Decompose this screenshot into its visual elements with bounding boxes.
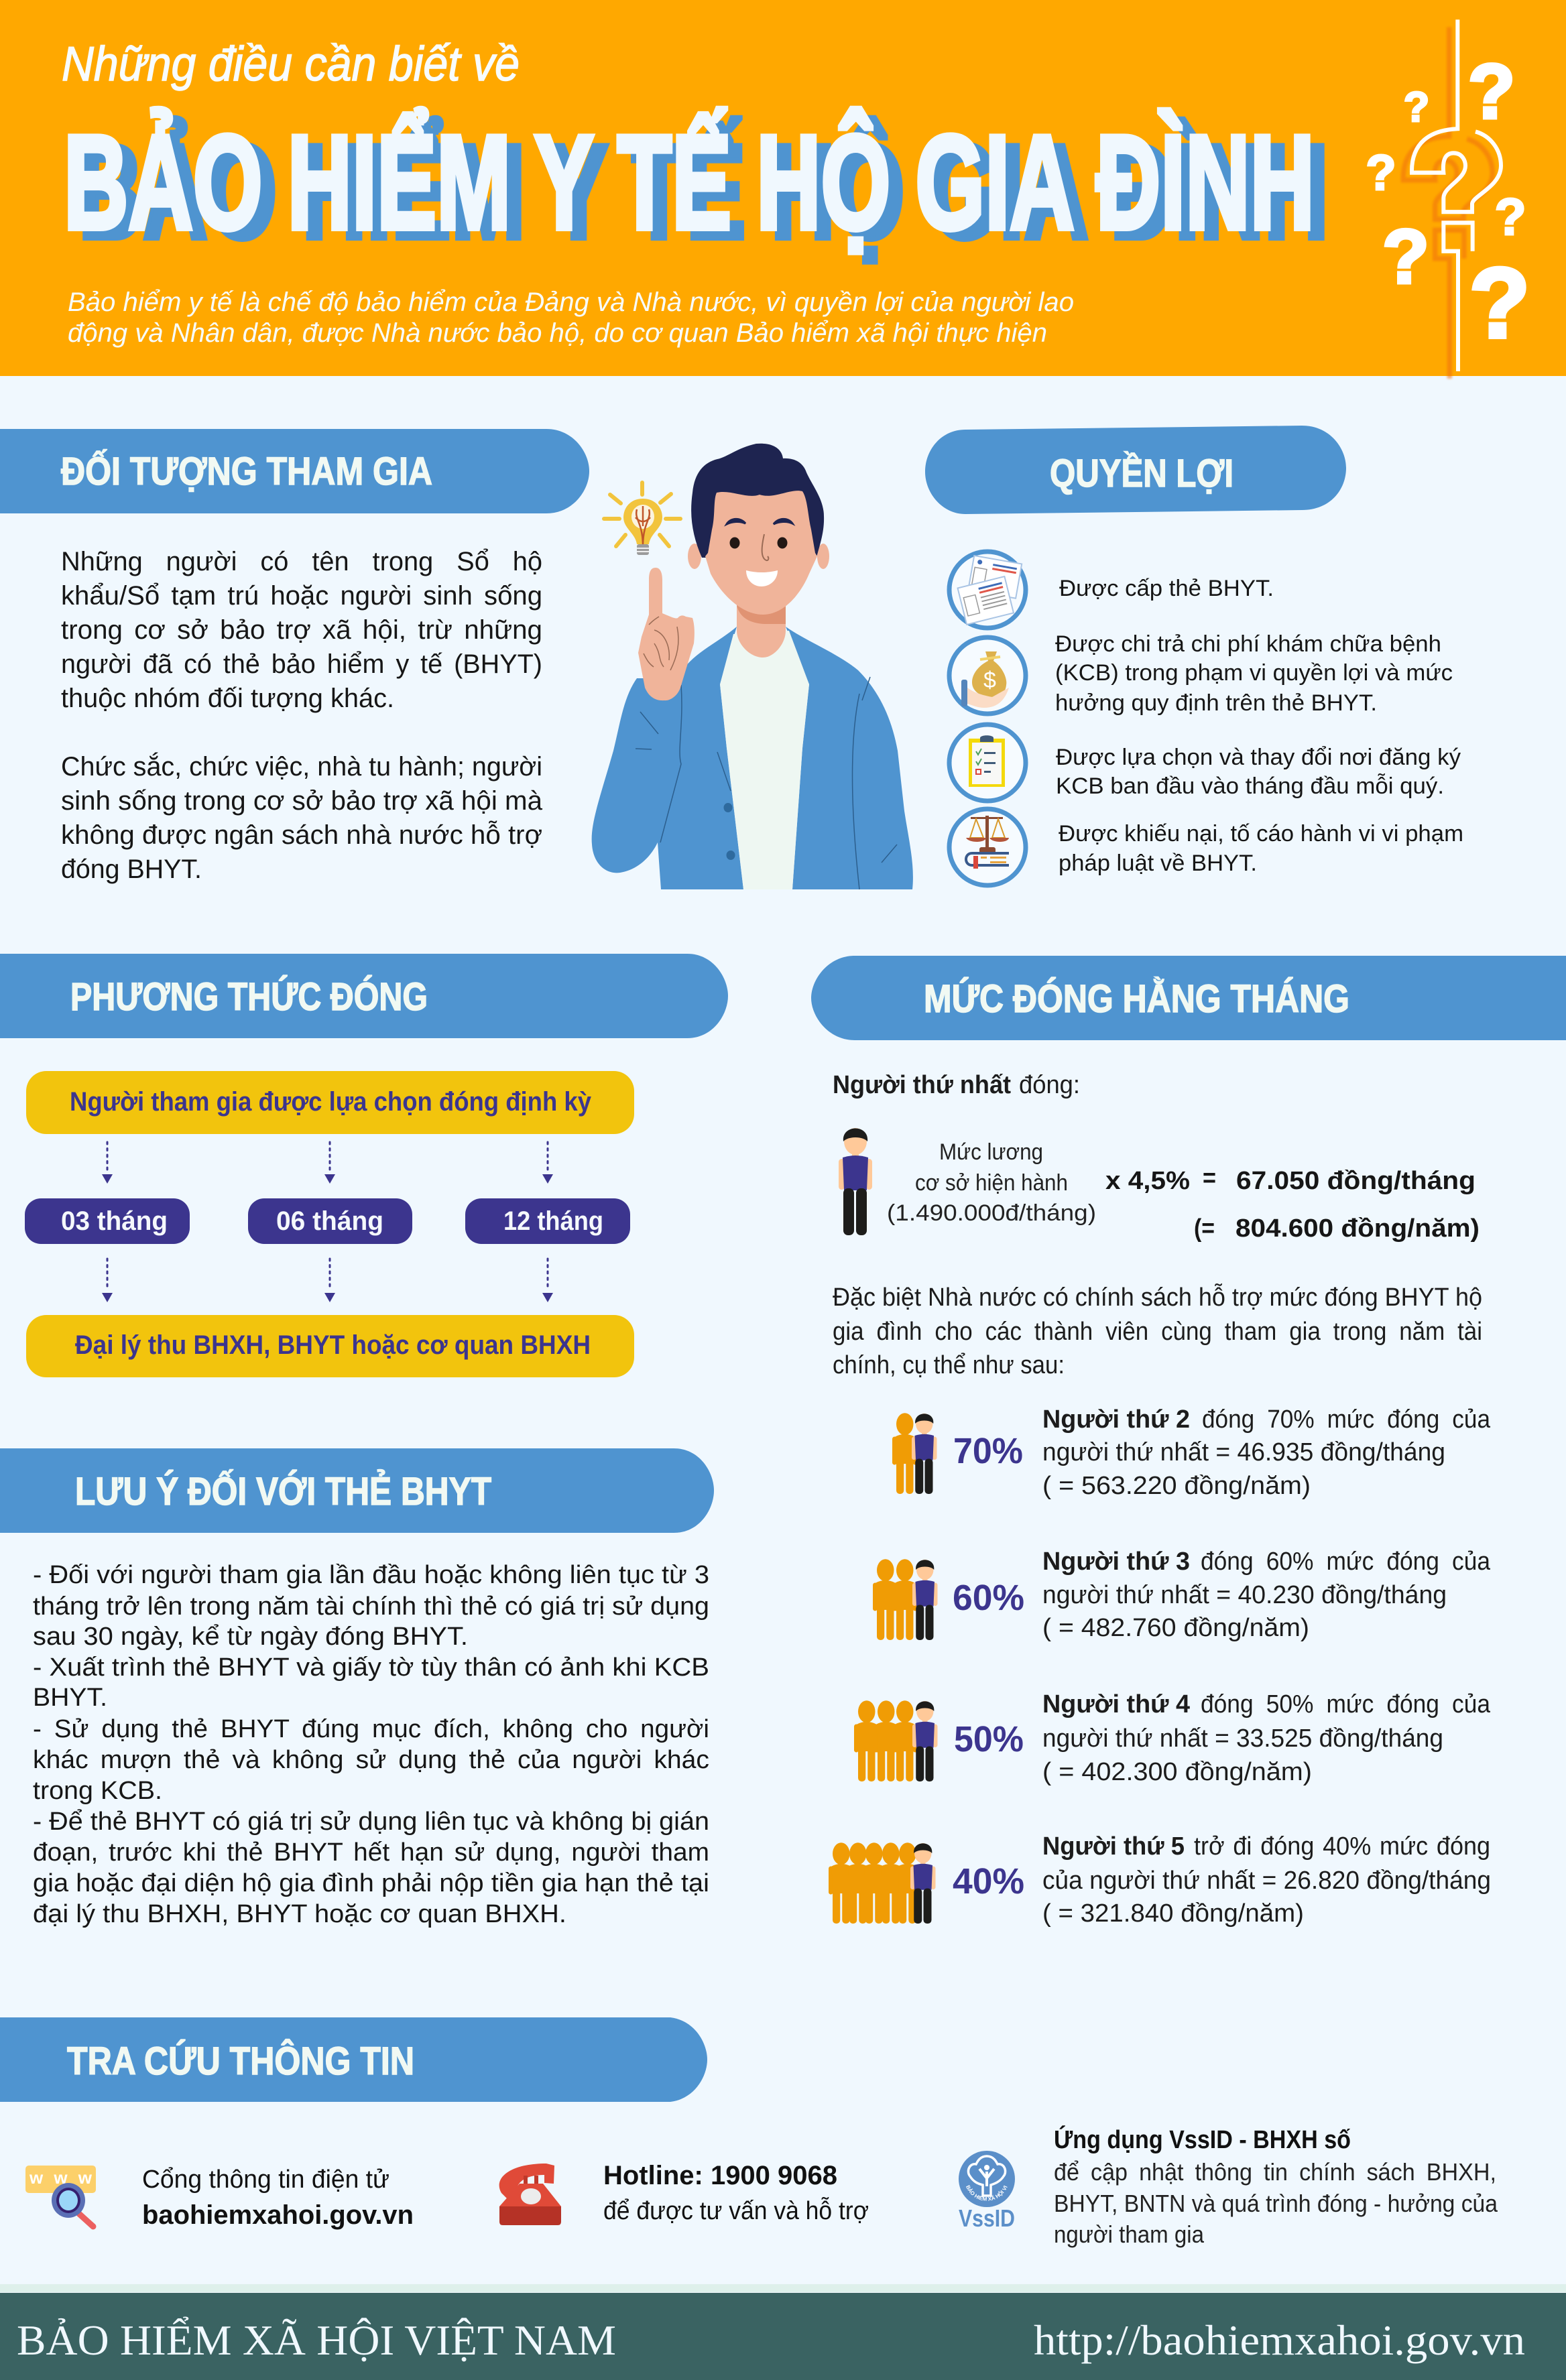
face [705,491,817,615]
icon: VssID logo [959,2151,1015,2232]
text: portal [142,2166,414,2230]
intro text: động và Nhân dân, được Nhà nước bảo hộ, do cơ quan Bảo hiểm xã hội thực hiện [68,318,1047,348]
text block: who: đóng BHYT. [61,855,202,884]
text: policy [833,1283,1482,1379]
text block: who: thuộc nhóm đối tượng khác. [61,684,394,713]
text: first person: đóng: [1019,1071,1080,1099]
text: hotline: Hotline: 1900 9068 [603,2161,837,2190]
icon: question marks: ? [1366,145,1396,200]
text block: who: không được ngân sách nhà nước hỗ trợ [61,820,542,850]
panel: lưu ý đối với thẻ BHYT [0,1448,714,1928]
ears [688,544,701,569]
box: 12 tháng [465,1198,630,1244]
intro text: Bảo hiểm y tế là chế độ bảo hiểm của Đảng và Nhà nước, vì quyền lợi của người lao [68,288,1074,317]
arrows: to agents [102,1259,553,1302]
icon: VssID logo: BẢO HIỂM XÃ HỘI VIỆT NAM [966,2185,1008,2201]
intro text [68,288,1074,348]
icon: www magnifier [25,2166,96,2227]
text: benefits list: (KCB) trong phạm vi quyền lợi và mức [1055,660,1453,686]
heading pill [0,2017,707,2102]
text block: notes: BHYT. [33,1684,107,1712]
footer bar [0,2284,1566,2380]
row: 50%: đóng 50% mức đóng của [1201,1690,1491,1718]
icon: telephone [499,2164,561,2225]
box: 03 tháng: 03 tháng [61,1206,168,1236]
panel: đối tượng tham gia [0,429,589,884]
row: 40% [829,1832,1491,1928]
text: benefits list: hưởng quy định trên thẻ BHYT. [1055,690,1377,716]
row: 40%: trở đi đóng 40% mức đóng [1194,1832,1490,1861]
text: benefits list: Được chi trả chi phí khám chữa bệnh [1055,631,1441,657]
heading pill: QUYỀN LỢI [1050,452,1233,495]
text block: notes [33,1561,709,1928]
heading pill: PHƯƠNG THỨC ĐÓNG [70,975,428,1019]
icon: VssID logo: VssID [959,2204,1015,2232]
row: 40%: Người thứ 5 [1042,1832,1185,1861]
box: agents [26,1315,634,1377]
heading pill [925,426,1346,514]
text: benefits list: Được cấp thẻ BHYT. [1059,576,1274,601]
box: choose period: Người tham gia được lựa chọn đóng định kỳ [70,1087,592,1117]
row: 70%: người thứ nhất = 46.935 đồng/tháng [1042,1438,1445,1466]
row: 40%: ( = 321.840 đồng/năm) [1042,1899,1304,1928]
text block: notes: sau 30 ngày, kể từ ngày đóng BHYT. [33,1623,468,1651]
text: VssID app: để cập nhật thông tin chính sách BHXH, [1054,2158,1496,2186]
text block: who: Những người có tên trong Sổ hộ [61,547,542,576]
row: 50% [854,1690,1491,1786]
text: VssID app: người tham gia [1054,2220,1205,2248]
row: 50%: 50% [954,1719,1024,1759]
footer website: http://baohiemxahoi.gov.vn [1034,2316,1525,2364]
icon: light bulb [604,483,680,555]
text block: who: Chức sắc, chức việc, nhà tu hành; người [61,751,542,781]
row: 60% [873,1548,1491,1642]
icon: question marks: ? [1494,188,1526,246]
box: choose period [26,1071,634,1134]
icon: checklist [949,725,1026,801]
icon: thẻ documents [949,552,1026,628]
text: hotline [603,2161,869,2225]
text block: notes: đoạn, trước khi thẻ BHYT hết hạn sử dụng, người tham [33,1838,709,1867]
icon: money bag [949,637,1026,714]
formula: 804.600 đồng/năm) [1236,1214,1480,1243]
heading pill: MỨC ĐÓNG HẰNG THÁNG [924,977,1349,1021]
box: 06 tháng: 06 tháng [276,1206,383,1236]
text block: notes: tháng trở lên trong năm tài chính thì thẻ có giá trị sử dụng [33,1592,709,1621]
formula: (= [1194,1214,1215,1243]
row: 70% [892,1405,1491,1500]
text: portal: Cổng thông tin điện tử [142,2166,389,2194]
row: 50%: Người thứ 4 [1042,1690,1190,1718]
neck [737,605,786,657]
heading pill [0,954,728,1038]
subtitle: Những điều cần biết về [62,38,520,91]
footer organisation name: BẢO HIỂM XÃ HỘI VIỆT NAM [17,2316,616,2364]
text: portal: baohiemxahoi.gov.vn [142,2200,414,2230]
text block: notes: khác mượn thẻ và không sử dụng thẻ của người khác [33,1746,709,1774]
text: benefits list: Được khiếu nại, tố cáo hành vi vi phạm [1059,821,1463,847]
row: 40%: 40% [953,1861,1024,1901]
text block: who: người đã có thẻ bảo hiểm y tế (BHYT) [61,649,542,679]
row: 70%: Người thứ 2 [1042,1405,1190,1434]
text: VssID app: BHYT, BNTN và quá trình đóng - hưởng của [1054,2190,1498,2217]
text block: who: sinh sống trong cơ sở bảo trợ xã hội mà [61,786,543,816]
icon: www magnifier: www [29,2168,93,2188]
row: 50%: ( = 402.300 đồng/năm) [1042,1758,1312,1786]
row: 60%: ( = 482.760 đồng/năm) [1042,1614,1309,1642]
jacket [786,627,913,889]
icon: scales and book [949,809,1026,885]
text block: notes: gia hoặc đại diện hộ gia đình phải nộp tiền gia hạn thẻ tại [33,1869,709,1897]
heading pill [0,429,589,513]
box: 06 tháng [248,1198,412,1244]
facial features [727,519,792,586]
formula: cơ sở hiện hành [915,1170,1068,1196]
formula: x 4,5% [1105,1167,1190,1195]
text: policy: gia đình cho các thành viên cùng tham gia trong năm tài [833,1318,1482,1346]
text block: notes: - Đối với người tham gia lần đầu hoặc không liên tục từ 3 [33,1561,709,1589]
icon: 6 people [829,1842,936,1924]
icon: question marks: ? [1469,248,1530,359]
formula: 67.050 đồng/tháng [1236,1167,1475,1195]
heading pill [0,1448,714,1533]
text block: notes: - Sử dụng thẻ BHYT đúng mục đích, không cho người [33,1715,709,1743]
row: 40%: của người thứ nhất = 26.820 đồng/tháng [1042,1867,1491,1895]
panel: phương thức đóng [0,954,728,1377]
text block: who: trong cơ sở bảo trợ xã hội, trừ những [61,615,542,645]
text: VssID app [1054,2125,1498,2248]
row: 60%: đóng 60% mức đóng của [1201,1548,1491,1576]
text block: notes: - Để thẻ BHYT có giá trị sử dụng liên tục và không bị gián [33,1808,709,1836]
heading pill: ĐỐI TƯỢNG THAM GIA [61,450,432,493]
heading pill: TRA CỨU THÔNG TIN [67,2040,414,2083]
row: 60%: Người thứ 3 [1042,1548,1190,1576]
text: benefits list: pháp luật về BHYT. [1059,851,1257,876]
row: 50%: người thứ nhất = 33.525 đồng/tháng [1042,1725,1443,1753]
text: hotline: để được tư vấn và hỗ trợ [603,2196,869,2225]
row: 70%: 70% [953,1431,1023,1471]
text block: notes: - Xuất trình thẻ BHYT và giấy tờ tùy thân có ảnh khi KCB [33,1653,709,1682]
row: 60%: 60% [953,1578,1024,1618]
icon: first person [839,1128,872,1235]
text: benefits list: Được lựa chọn và thay đổi nơi đăng ký [1056,745,1461,770]
illustration: man pointing with light bulb [592,444,913,889]
text: policy: Đặc biệt Nhà nước có chính sách hỗ trợ mức đóng BHYT hộ [833,1283,1482,1312]
icon: 2 people [892,1413,937,1494]
text: benefits list [1055,576,1463,876]
box: 12 tháng: 12 tháng [503,1206,603,1236]
formula: = [1203,1164,1216,1192]
text: policy: chính, cụ thể như sau: [833,1351,1065,1379]
row: 60%: người thứ nhất = 40.230 đồng/tháng [1042,1581,1447,1609]
icon: question marks [1366,19,1530,379]
text block: notes: đại lý thu BHXH, BHYT hoặc cơ quan BHXH. [33,1900,566,1928]
hair [691,444,824,558]
icon: money bag: $ [983,668,996,693]
text: VssID app: Ứng dụng VssID - BHXH số [1054,2125,1351,2154]
box: agents: Đại lý thu BHXH, BHYT hoặc cơ quan BHXH [75,1330,591,1360]
jacket seams [636,677,897,889]
header banner [0,0,1566,379]
formula: Mức lương [939,1139,1043,1165]
icon: 4 people [854,1700,937,1781]
hand [638,568,695,700]
row: 70%: đóng 70% mức đóng của [1202,1405,1491,1434]
box: 03 tháng [25,1198,190,1244]
shirt [720,631,809,889]
text block: who [61,547,543,884]
panel: quyền lợi [925,426,1463,885]
panel: mức đóng hằng tháng [811,956,1566,1928]
formula [887,1139,1480,1243]
icon: 3 people [873,1559,937,1640]
heading pill: LƯU Ý ĐỐI VỚI THẺ BHYT [75,1470,491,1513]
text: benefits list: KCB ban đầu vào tháng đầu mỗi quý. [1056,773,1444,799]
arrows: to periods [102,1142,553,1184]
formula: (1.490.000đ/tháng) [887,1200,1096,1226]
text: first person: Người thứ nhất [833,1071,1011,1099]
icon: question marks: ? [1468,49,1515,135]
icon: question marks: ? [1382,214,1429,300]
row: 70%: ( = 563.220 đồng/năm) [1042,1472,1311,1500]
icon: question marks: ? [1404,84,1429,131]
text block: notes: trong KCB. [33,1777,162,1805]
text block: who: khẩu/Sổ tạm trú hoặc người sinh sống [61,581,542,611]
heading pill [811,956,1566,1040]
